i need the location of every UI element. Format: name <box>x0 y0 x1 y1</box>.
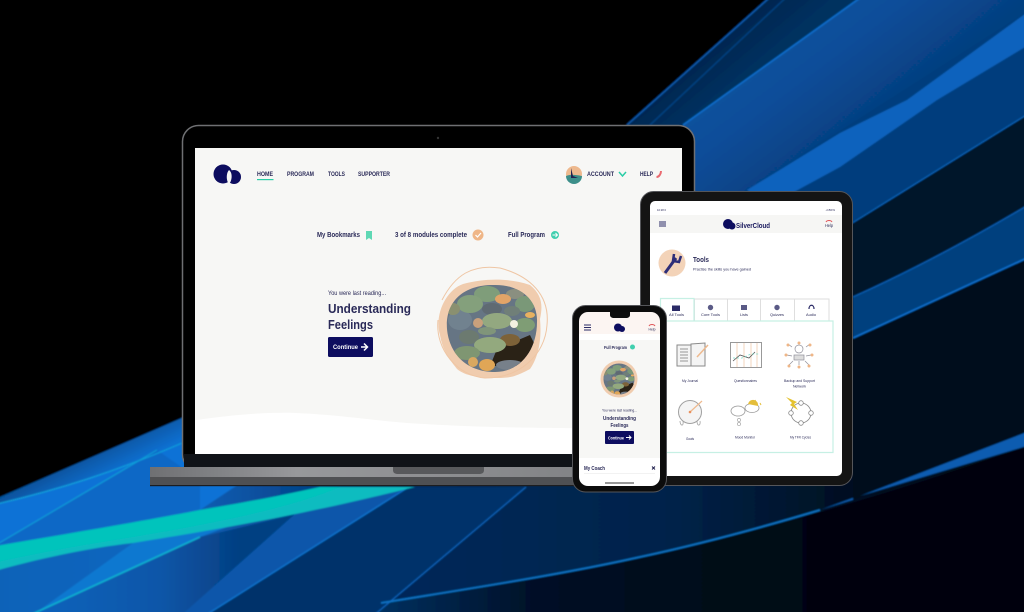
lily pond image with peach ring <box>438 267 547 378</box>
navigation: HOME <box>257 172 273 178</box>
tablet header <box>645 215 847 233</box>
navigation: SUPPORTER <box>358 172 391 178</box>
tablet body <box>640 192 852 486</box>
teal band <box>0 487 415 574</box>
phone reading text: Feelings <box>610 423 628 429</box>
reading text: Understanding <box>328 301 411 316</box>
tool labels: My Journal <box>682 379 698 383</box>
tablet header: Help <box>825 223 834 228</box>
phone continue button: Continue <box>608 436 625 440</box>
tabs: Audio <box>806 313 816 317</box>
tools heading <box>658 250 751 276</box>
tabs: Lists <box>740 313 748 317</box>
icon: mood monitor <box>731 400 761 426</box>
phone continue button <box>605 431 634 444</box>
laptop <box>150 126 694 486</box>
phone body <box>572 306 666 492</box>
logo <box>214 164 241 184</box>
status row: 3 of 8 modules complete <box>395 232 467 239</box>
tool labels: Mood Monitor <box>735 436 756 440</box>
camera dot <box>437 137 439 139</box>
curved bright line <box>381 510 820 603</box>
continue button: Continue <box>333 344 358 351</box>
account and help: HELP <box>640 172 653 178</box>
reading text: You were last reading... <box>328 291 386 297</box>
tool labels: Goals <box>686 437 694 441</box>
laptop screen <box>190 143 687 459</box>
tabs: All Tools <box>669 313 684 317</box>
tool labels: Backup and Support <box>784 379 816 383</box>
continue button <box>328 337 373 357</box>
laptop base <box>150 467 640 486</box>
phone reading text: Understanding <box>603 416 636 422</box>
tablet screen <box>645 196 847 481</box>
phone screen <box>579 312 660 486</box>
icon: questionnaires <box>730 342 762 368</box>
status bar <box>657 209 835 211</box>
tools heading: Tools <box>693 257 709 264</box>
phone pond image <box>600 360 638 398</box>
phone reading text <box>602 409 637 428</box>
dark area and ribbon: right of tablet <box>840 107 1024 500</box>
icon: my journal <box>677 343 708 366</box>
tool labels: My TFR Cycles <box>790 436 811 440</box>
notch <box>610 312 630 318</box>
reading text: Feelings <box>328 317 373 332</box>
tool labels <box>682 379 816 441</box>
tabs: Quizzes <box>770 313 784 317</box>
phone <box>572 306 666 492</box>
phone header <box>579 312 660 334</box>
tabs: Core Tools <box>701 313 720 317</box>
tabs <box>669 299 829 321</box>
ribbon: upper right <box>600 0 1024 300</box>
status bar: 10:28 0 <box>657 208 666 212</box>
reading text <box>328 291 411 332</box>
status bar: .ıl 80% <box>825 208 835 212</box>
tool labels: Questionnaires <box>734 379 757 383</box>
laptop lid and bezel <box>182 126 694 470</box>
navigation <box>257 172 391 180</box>
account and help <box>566 166 661 184</box>
tablet <box>640 192 852 486</box>
tablet header: SilverCloud <box>736 221 770 230</box>
tools box <box>660 298 833 452</box>
account and help: ACCOUNT <box>587 172 614 178</box>
status row: My Bookmarks <box>317 232 360 239</box>
full program link: Full Program <box>604 345 627 350</box>
navigation: PROGRAM <box>287 172 314 178</box>
white wave <box>195 413 572 454</box>
ribbon: lower area <box>0 300 1024 612</box>
my coach panel: My Coach <box>584 466 605 472</box>
status row: Full Program <box>508 232 545 239</box>
phone header: Help <box>648 328 656 332</box>
tools heading: Practise the skills you have gained <box>693 268 751 272</box>
tool labels: Network <box>793 384 806 388</box>
my coach panel <box>584 466 656 474</box>
home indicator <box>605 482 634 484</box>
icon: goals <box>678 400 702 425</box>
phone reading text: You were last reading... <box>602 408 637 412</box>
status row <box>317 230 559 240</box>
icon: backup and support network <box>784 342 814 368</box>
icon: my TFR cycles <box>786 397 813 425</box>
navigation: TOOLS <box>328 172 345 178</box>
